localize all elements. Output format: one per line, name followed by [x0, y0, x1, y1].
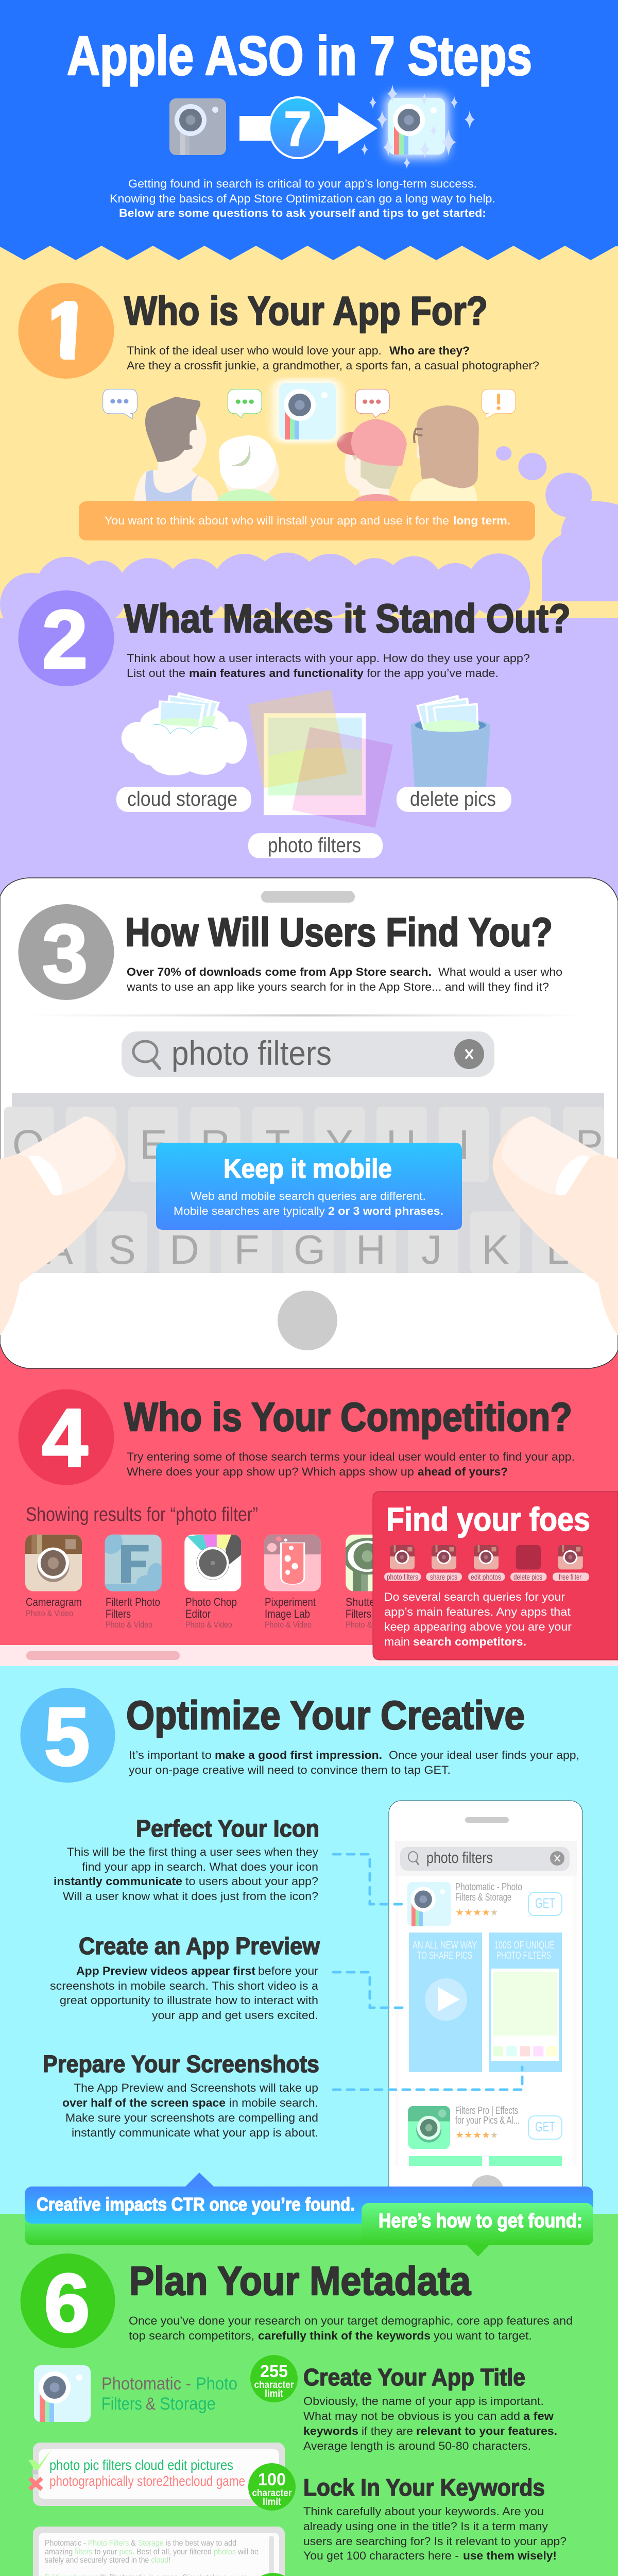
dashed connectors [333, 1854, 522, 2090]
subsection: create your app title: keywords [303, 2425, 358, 2437]
body text [126, 965, 562, 993]
panel: step 3 phone [0, 878, 618, 1368]
badge: 255 character limit [250, 2355, 298, 2402]
results heading: Showing results for “photo filter” [26, 1504, 258, 1526]
subsection: lock in your keywords: Think carefully about your keywords. Are you [303, 2505, 544, 2518]
subsection: lock in your keywords: users are searching for? Is it relevant to your app? [303, 2535, 566, 2548]
keyboard: I [458, 1122, 470, 1167]
keyboard: F [234, 1227, 259, 1273]
illustration: people looking at app [103, 379, 516, 517]
body text [127, 344, 539, 372]
app listing: Photomatic [407, 1882, 562, 1926]
panel: step 4 competition [19, 1389, 618, 1660]
foes body text: app’s main features. Any apps that [384, 1605, 571, 1618]
subsection: perfect your icon: Will a user know what it does just from the icon? [63, 1890, 318, 1903]
subsection: create an app preview: App Preview videos appear first [76, 1964, 256, 1977]
callout: keep it mobile: Web and mobile search queries are different. [191, 1190, 426, 1202]
foes body text: Do several search queries for your [384, 1590, 565, 1603]
body text [129, 2314, 573, 2342]
arrow [239, 103, 377, 154]
subsection: create your app title: relevant to your features. [416, 2425, 557, 2437]
app title example [34, 2365, 237, 2422]
callout: keep it mobile: 2 or 3 word phrases. [328, 1205, 443, 1217]
body text: It’s important to [129, 1749, 212, 1761]
badge: 4000 character limit [249, 2573, 297, 2576]
keywords box [28, 2443, 285, 2506]
badge: 100 character limit [248, 2463, 296, 2511]
subsection: prepare your screenshots: instantly communicate what your app is about. [72, 2126, 318, 2139]
description box: safely and securely stored in the cloud! [45, 2556, 170, 2565]
person: grandmother [217, 435, 279, 517]
body text: What would a user who [438, 965, 562, 978]
subsection: create your app title: Create Your App Title [303, 2364, 525, 2391]
badge: 255 character limit: character [254, 2380, 294, 2391]
keyboard: J [421, 1227, 442, 1273]
search bar [122, 1031, 494, 1077]
subsection: prepare your screenshots: Prepare Your Screenshots [43, 2050, 319, 2077]
heading: What Makes it Stand Out? [124, 596, 571, 641]
intro text: Below are some questions to ask yourself and tips to get started: [119, 207, 486, 219]
app title example: Filters [101, 2394, 142, 2414]
icon: shiny camera app [361, 84, 475, 169]
keyboard: H [356, 1227, 386, 1273]
home button [278, 1291, 337, 1350]
subsection: perfect your icon: find your app in search. What does your icon [82, 1860, 318, 1873]
badge: 100 character limit: 100 [258, 2470, 286, 2489]
badge: 255 character limit: limit [265, 2388, 284, 2399]
body text: Think of the ideal user who would love your app. [127, 344, 382, 357]
intro text [110, 177, 495, 219]
app labels: Filters [106, 1607, 131, 1620]
app labels: Photo & Video [265, 1620, 312, 1630]
app title example: Storage [160, 2394, 216, 2414]
app listing: Photomatic: ★ [490, 1907, 498, 1918]
keyboard: O [508, 1122, 540, 1167]
panel: find your foes: photo filters [387, 1573, 418, 1582]
description box [33, 2527, 285, 2576]
icon: cloud storage [122, 692, 247, 775]
app listing: Filters Pro: Filters Pro | Effects [455, 2105, 518, 2116]
body text: Are they a crossfit junkie, a grandmother, a sports fan, a casual photographer? [127, 359, 539, 372]
description box: Photomatic - Photo Filters & Storage is the best way to add [45, 2539, 236, 2548]
icon: Cameragram [25, 1535, 82, 1591]
app labels: Photo & Video [346, 1620, 393, 1630]
badge: 255 character limit: 255 [260, 2362, 288, 2381]
subsection: perfect your icon: instantly communicate [54, 1875, 182, 1888]
keyboard: T [265, 1122, 290, 1167]
banner: creative impacts CTR / how to get found: Creative impacts CTR once you’re found. [37, 2194, 355, 2215]
icon: speech bubbles [103, 389, 516, 419]
heading: How Will Users Find You? [125, 909, 553, 955]
app labels: Photo & Video [106, 1620, 152, 1630]
number badge 5: 5 [44, 1690, 90, 1783]
icon: app on center stage [272, 379, 342, 443]
callout: long term: long term. [453, 514, 510, 527]
keywords box: photo pic filters cloud edit pictures [49, 2457, 233, 2473]
subsection: create an app preview: your app and get users excited. [152, 2009, 318, 2022]
panel: step 1 who is your app for [0, 283, 618, 635]
purple clouds transition [0, 446, 618, 635]
icon: FilterIt [105, 1534, 162, 1591]
subsection: prepare your screenshots: The App Preview and Screenshots will take up [74, 2081, 318, 2094]
subsection: prepare your screenshots: in mobile search. [229, 2096, 318, 2109]
app listing: Photomatic: Filters & Storage [455, 1892, 511, 1903]
body text [127, 652, 530, 680]
heading: Who is Your Competition? [124, 1394, 572, 1439]
body text [127, 1450, 575, 1478]
body text: Where does your app show up? Which apps show up [127, 1465, 414, 1478]
heading: Who is Your App For? [124, 288, 488, 333]
subsection: lock in your keywords [303, 2474, 566, 2562]
app screenshots: TO SHARE PICS [417, 1950, 472, 1961]
phone speaker [261, 891, 355, 903]
subsection: lock in your keywords: use them wisely! [463, 2549, 557, 2562]
app labels [26, 1596, 393, 1630]
banner: creative impacts CTR / how to get found [25, 2173, 593, 2257]
subsection: prepare your screenshots [43, 2050, 319, 2139]
keyboard: A [45, 1227, 73, 1273]
person: woman with glasses [410, 405, 479, 501]
person: red cap [337, 419, 407, 514]
subsection: perfect your icon: Perfect Your Icon [136, 1815, 319, 1842]
app listing: Filters Pro [408, 2105, 562, 2166]
number badge 6: 6 [44, 2257, 90, 2349]
subsection: create an app preview: great opportunity to illustrate how to interact with [60, 1994, 318, 2007]
subsection: perfect your icon [54, 1815, 319, 1903]
description box: amazing filters to your pics. Best of all, your filtered photos will be [45, 2548, 259, 2556]
keyboard: P [575, 1122, 603, 1167]
panel: find your foes: Find your foes [386, 1501, 590, 1538]
panel: find your foes: share pics [430, 1573, 457, 1582]
illustration: hands holding phone [0, 1116, 618, 1335]
app labels: Photo Chop [185, 1596, 237, 1608]
badge: 100 character limit: limit [263, 2497, 282, 2507]
body text: wants to use an app like yours search for in the App Store... and will they find it? [126, 980, 549, 993]
body text: make a good first impression. [215, 1749, 382, 1761]
keyboard [4, 1093, 604, 1273]
app listing: Photomatic: Photomatic - Photo [455, 1882, 522, 1893]
subsection: perfect your icon: to users about your app? [185, 1875, 318, 1888]
body text: Try entering some of those search terms your ideal user would enter to find your app. [127, 1450, 575, 1463]
icon: Pixperiment [264, 1535, 321, 1591]
body text: your on-page creative will need to convince them to tap GET. [129, 1764, 451, 1776]
body text [129, 1749, 579, 1776]
app listing: Filters Pro: GET [535, 2119, 555, 2134]
number badge 1: 1 [43, 285, 89, 378]
body text: ahead of yours? [418, 1465, 508, 1478]
subsection: lock in your keywords: You get 100 characters here - [303, 2549, 459, 2562]
panel: step 5 optimize creative [21, 1688, 582, 2204]
panel: step 2 what makes it stand out [19, 590, 571, 858]
number badge 2 [19, 590, 114, 686]
subsection: perfect your icon: This will be the first thing a user sees when they [67, 1845, 318, 1858]
app listing: Filters Pro: for your Pics & Al... [455, 2115, 520, 2126]
callout: long term [79, 501, 535, 540]
body text: Over 70% of downloads come from App Store search. [127, 965, 432, 978]
phone mockup [389, 1801, 582, 2204]
panel: step 6 plan your metadata [0, 2253, 618, 2576]
callout: long term: You want to think about who will install your app and use it for the [105, 514, 449, 527]
keyboard: E [140, 1122, 167, 1167]
foes body text [384, 1590, 572, 1648]
subsection: create your app title: a few [523, 2410, 554, 2422]
keyboard: L [546, 1227, 569, 1273]
callout: keep it mobile: Keep it mobile [224, 1154, 392, 1184]
keywords box: photographically store2thecloud game [49, 2473, 245, 2489]
number badge 5 [21, 1688, 115, 1783]
body text: Think about how a user interacts with your app. How do they use your app? [127, 652, 530, 665]
app labels: Image Lab [265, 1607, 310, 1620]
label: cloud storage: cloud storage [127, 788, 237, 810]
foes body text: search competitors. [413, 1635, 526, 1648]
app labels: Cameragram [26, 1596, 82, 1608]
badge: 100 character limit: character [252, 2488, 292, 2499]
icon: trash cup [410, 695, 490, 787]
subsection: create your app title: What may not be obvious is you can add [303, 2410, 520, 2422]
person: man in tank top [134, 397, 219, 501]
mini app icons [384, 1545, 589, 1581]
app labels: FilterIt Photo [106, 1596, 160, 1608]
app screenshots [409, 1933, 562, 2072]
app labels: Photo & Video [185, 1620, 232, 1630]
phone body [0, 878, 618, 1368]
keyboard: Y [325, 1122, 353, 1167]
phone tab pill [26, 1651, 180, 1660]
subsection: lock in your keywords: already using one in the title? Is it a term many [303, 2520, 548, 2533]
number badge 1 [19, 283, 114, 379]
body text: you want to target. [434, 2329, 532, 2342]
subsection: prepare your screenshots: Make sure your screenshots are compelling and [65, 2111, 318, 2124]
app screenshots: AN ALL NEW WAY [413, 1940, 477, 1951]
competitor app icons [25, 1534, 373, 1591]
panel: find your foes: delete pics [513, 1573, 542, 1582]
heading: Optimize Your Creative [126, 1692, 525, 1738]
app listing: Photomatic: ★★★★ [455, 1907, 490, 1918]
subsection: create an app preview [50, 1933, 320, 2022]
banner: creative impacts CTR / how to get found: Here’s how to get found: [379, 2210, 582, 2232]
app labels: Shutter [346, 1596, 379, 1608]
subsection: lock in your keywords: Lock In Your Keywords [303, 2474, 545, 2501]
app listing: Filters Pro: ★ [490, 2130, 498, 2141]
keyboard: S [108, 1227, 136, 1273]
panel: find your foes: free filter [559, 1573, 581, 1582]
foes body text: main [384, 1635, 410, 1648]
body text: main features and functionality [189, 667, 364, 680]
number badge 4 [19, 1389, 114, 1485]
search bar: photo filters [171, 1034, 332, 1072]
app screenshots: 100S OF UNIQUE [494, 1940, 555, 1951]
subsection: create an app preview: before your [258, 1964, 318, 1977]
body text: carefully think of the keywords [258, 2329, 431, 2342]
heading: Plan Your Metadata [129, 2258, 471, 2303]
subsection: prepare your screenshots: over half of the screen space [62, 2096, 226, 2109]
subsection: create your app title: if they are [362, 2425, 413, 2437]
keyboard: D [169, 1227, 199, 1273]
keyboard: W [71, 1122, 110, 1167]
number badge 3 [19, 904, 114, 1000]
keyboard: G [294, 1227, 325, 1273]
icon: check and cross [28, 2450, 51, 2489]
subsection: create an app preview: Create an App Preview [79, 1933, 320, 1959]
number badge 3: 3 [42, 907, 88, 999]
icon: Shutter [346, 1534, 373, 1591]
keyboard: R [200, 1122, 230, 1167]
app labels: Photo & Video [26, 1608, 73, 1618]
hero illustration: dull icon, 7 arrow, shiny icon [169, 84, 475, 169]
title: Apple ASO in 7 Steps [67, 25, 532, 87]
phone mockup: photo filters [426, 1849, 493, 1867]
body text: List out the [127, 667, 185, 680]
body text: Who are they? [389, 344, 470, 357]
app screenshots: PHOTO FILTERS [496, 1950, 551, 1961]
app labels: Editor [185, 1607, 211, 1620]
icon: grey camera app [169, 98, 226, 155]
app listing: Filters Pro: ★★★★ [455, 2130, 490, 2141]
number badge 4: 4 [42, 1392, 88, 1484]
panel: find your foes: edit photos [471, 1573, 501, 1582]
icon: Photo Chop [184, 1535, 241, 1591]
body text: top search competitors, [129, 2329, 254, 2342]
callout: keep it mobile [156, 1143, 462, 1230]
foes body text: keep appearing above you are your [384, 1620, 572, 1633]
label: photo filters: photo filters [268, 834, 361, 857]
callout: keep it mobile: Mobile searches are typically [174, 1205, 325, 1217]
keyboard: Q [12, 1122, 44, 1167]
app title example: & [146, 2394, 156, 2414]
subsection: create an app preview: screenshots in mobile search. This short video is a [50, 1979, 319, 1992]
label: delete pics: delete pics [410, 788, 496, 810]
keyboard: K [482, 1227, 509, 1273]
panel: find your foes [373, 1492, 618, 1660]
number badge 2: 2 [42, 593, 88, 685]
icon: number 7 badge: 7 [284, 101, 312, 157]
app labels: Pixperiment [265, 1596, 316, 1608]
body text: Once your ideal user finds your app, [389, 1749, 579, 1761]
number badge 6 [21, 2253, 115, 2349]
app listing: Photomatic: GET [535, 1895, 555, 1911]
intro text: Getting found in search is critical to your app’s long-term success. [128, 177, 477, 190]
icon: number 7 badge [269, 97, 326, 158]
illustration: features [122, 690, 490, 828]
body text: Once you’ve done your research on your target demographic, core app features and [129, 2314, 573, 2327]
keyboard: U [386, 1122, 416, 1167]
app title example: Photo [196, 2374, 237, 2394]
subsection: create your app title: Obviously, the name of your app is important. [303, 2395, 544, 2408]
icon: photo filters [248, 690, 393, 828]
subsection: create your app title [303, 2364, 557, 2452]
body text: for the app you’ve made. [367, 667, 499, 680]
app title example: Photomatic - [101, 2374, 191, 2394]
intro text: Knowing the basics of App Store Optimization can go a long way to help. [110, 192, 495, 205]
subsection: create your app title: Average length is around 50-80 characters. [303, 2439, 531, 2452]
app labels: Filters [346, 1607, 371, 1620]
